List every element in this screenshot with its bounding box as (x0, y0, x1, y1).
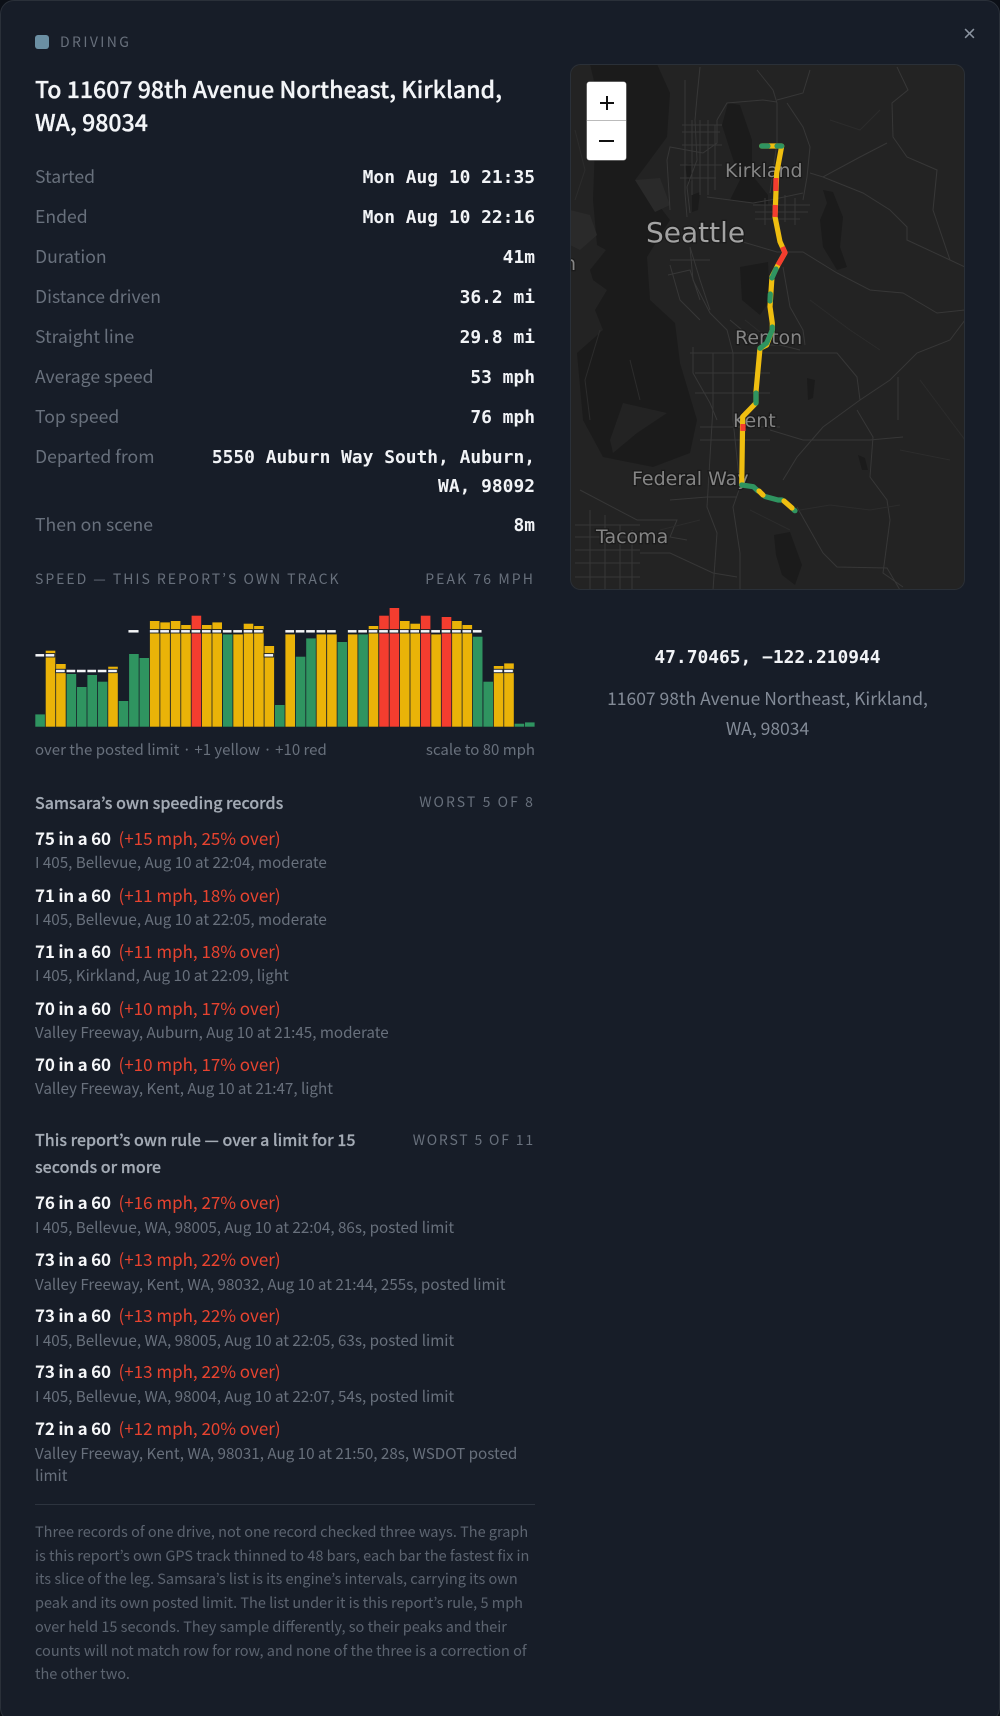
header: mode tag (35, 32, 131, 52)
row: duration: Duration (35, 244, 107, 269)
zoom out (599, 140, 614, 142)
row: departed from: 5550 Auburn Way South, Auburn, (212, 447, 535, 468)
rule record 1: I 405, Bellevue, WA, 98005, Aug 10 at 22:04, 86s, posted limit (35, 1216, 454, 1238)
methodology note: counts will not match row for row, and none of the three is a correction of (35, 1640, 527, 1661)
row: departed from: WA, 98092 (438, 476, 535, 497)
row: duration: 41m (503, 247, 535, 268)
chart footnote: scale: scale to 80 mph (426, 739, 535, 760)
destination address: 11607 98th Avenue Northeast, Kirkland, (607, 686, 928, 711)
bar chart: speed (35, 608, 535, 727)
rule record 3 (35, 1302, 454, 1351)
row: ended: Ended (35, 204, 88, 229)
row: started (35, 164, 535, 189)
record 4 (35, 995, 389, 1043)
row: started: Started (35, 164, 95, 189)
water (577, 64, 868, 585)
row: then on scene (35, 512, 535, 537)
row: distance: 36.2 mi (460, 287, 535, 308)
rule record 2: Valley Freeway, Kent, WA, 98032, Aug 10 at 21:44, 255s, posted limit (35, 1273, 506, 1295)
rule record 5 (35, 1415, 517, 1486)
methodology note: its slice of the leg. Samsara’s list is its engine’s intervals, carrying its own (35, 1568, 518, 1589)
place labels (564, 160, 803, 548)
row: ended (35, 204, 535, 229)
label: Tacoma: Tacoma (595, 526, 668, 548)
row: straight line: 29.8 mi (460, 327, 535, 348)
section heading: report rule (35, 1127, 356, 1178)
record 3: I 405, Kirkland, Aug 10 at 22:09, light (35, 964, 289, 986)
record 5 (35, 1051, 333, 1099)
label: Renton: Renton (735, 327, 802, 349)
section heading: Samsara records: Samsara’s own speeding records (35, 790, 283, 814)
label: DRIVING: DRIVING (60, 32, 131, 52)
row: average speed (35, 364, 535, 389)
row: distance: Distance driven (35, 284, 161, 309)
record list: report rule (35, 1189, 517, 1486)
map panel (570, 64, 965, 590)
rule record 3: I 405, Bellevue, WA, 98005, Aug 10 at 22:05, 63s, posted limit (35, 1329, 454, 1351)
row: departed from: Departed from (35, 444, 154, 469)
record 1: I 405, Bellevue, Aug 10 at 22:04, moderate (35, 851, 327, 873)
row: then on scene: 8m (513, 515, 535, 536)
row: average speed: Average speed (35, 364, 154, 389)
rule record 1: 76 in a 60 (+16 mph, 27% over) (35, 1189, 281, 1214)
row: ended: Mon Aug 10 22:16 (363, 207, 535, 228)
rule record 4: I 405, Bellevue, WA, 98004, Aug 10 at 22:07, 54s, posted limit (35, 1385, 454, 1407)
methodology note: is this report’s own GPS track thinned to 48 bars, each bar the fastest fix in (35, 1545, 529, 1566)
zoom control (586, 82, 626, 160)
rule record 5: 72 in a 60 (+12 mph, 20% over) (35, 1415, 281, 1440)
row: started: Mon Aug 10 21:35 (363, 167, 535, 188)
record list: Samsara (35, 825, 389, 1099)
row: average speed: 53 mph (470, 367, 535, 388)
rule record 4 (35, 1358, 454, 1407)
speed chart peak label: PEAK 76 MPH (425, 569, 535, 589)
close button: × (962, 23, 977, 44)
row: departed from (35, 444, 535, 497)
zoom in (600, 96, 614, 110)
rule record 1 (35, 1189, 454, 1238)
rule record 3: 73 in a 60 (+13 mph, 22% over) (35, 1302, 281, 1327)
roads (575, 67, 965, 590)
row: distance (35, 284, 535, 309)
row: duration (35, 244, 535, 269)
record 3 (35, 938, 289, 986)
record 3: 71 in a 60 (+11 mph, 18% over) (35, 938, 281, 963)
methodology note: over held 15 seconds. They sample differently, so their peaks and their (35, 1616, 507, 1637)
rule record 2 (35, 1246, 506, 1295)
record 2: I 405, Bellevue, Aug 10 at 22:05, moderate (35, 908, 327, 930)
section heading: report rule: This report’s own rule — over a limit for 15 (35, 1127, 356, 1151)
label: Kirkland: Kirkland (725, 160, 803, 182)
record 5: Valley Freeway, Kent, Aug 10 at 21:47, light (35, 1077, 333, 1099)
coordinates: 47.70465, −122.210944 (654, 647, 881, 668)
record 4: Valley Freeway, Auburn, Aug 10 at 21:45, moderate (35, 1021, 389, 1043)
label: Kent: Kent (733, 410, 776, 432)
chart footnote: thresholds: over the posted limit · +1 yellow · +10 red (35, 739, 327, 760)
title: WA, 98034 (35, 104, 148, 138)
rule record 2: 73 in a 60 (+13 mph, 22% over) (35, 1246, 281, 1271)
methodology note: Three records of one drive, not one record checked three ways. The graph (35, 1521, 528, 1542)
record 5: 70 in a 60 (+10 mph, 17% over) (35, 1051, 281, 1076)
title (35, 70, 502, 138)
section count: worst 5 of 8: WORST 5 OF 8 (419, 792, 535, 812)
label: Federal Way: Federal Way (632, 468, 749, 490)
row: top speed (35, 404, 535, 429)
row: top speed: 76 mph (470, 407, 535, 428)
record 4: 70 in a 60 (+10 mph, 17% over) (35, 995, 281, 1020)
row: straight line (35, 324, 535, 349)
rule record 5: Valley Freeway, Kent, WA, 98031, Aug 10 at 21:50, 28s, WSDOT posted (35, 1442, 517, 1464)
destination address: WA, 98034 (726, 716, 809, 741)
record 2 (35, 882, 327, 930)
section heading: report rule: seconds or more (35, 1154, 161, 1178)
methodology note: peak and its own posted limit. The list under it is this report’s rule, 5 mph (35, 1592, 523, 1613)
methodology note: the other two. (35, 1663, 130, 1684)
section count: worst 5 of 11: WORST 5 OF 11 (413, 1130, 535, 1150)
destination address (607, 686, 928, 741)
row: straight line: Straight line (35, 324, 134, 349)
row: top speed: Top speed (35, 404, 119, 429)
trip detail rows (35, 164, 535, 537)
title: To 11607 98th Avenue Northeast, Kirkland, (35, 70, 502, 104)
record 1 (35, 825, 327, 873)
row: then on scene: Then on scene (35, 512, 153, 537)
rule record 4: 73 in a 60 (+13 mph, 22% over) (35, 1358, 281, 1383)
record 2: 71 in a 60 (+11 mph, 18% over) (35, 882, 281, 907)
route line (742, 146, 795, 511)
rule record 5: limit (35, 1464, 67, 1486)
speed chart heading: SPEED — THIS REPORT’S OWN TRACK (35, 569, 341, 589)
methodology note (35, 1521, 529, 1684)
record 1: 75 in a 60 (+15 mph, 25% over) (35, 825, 281, 850)
label: Seattle: Seattle (646, 216, 745, 249)
icon: driving swatch (35, 35, 49, 49)
